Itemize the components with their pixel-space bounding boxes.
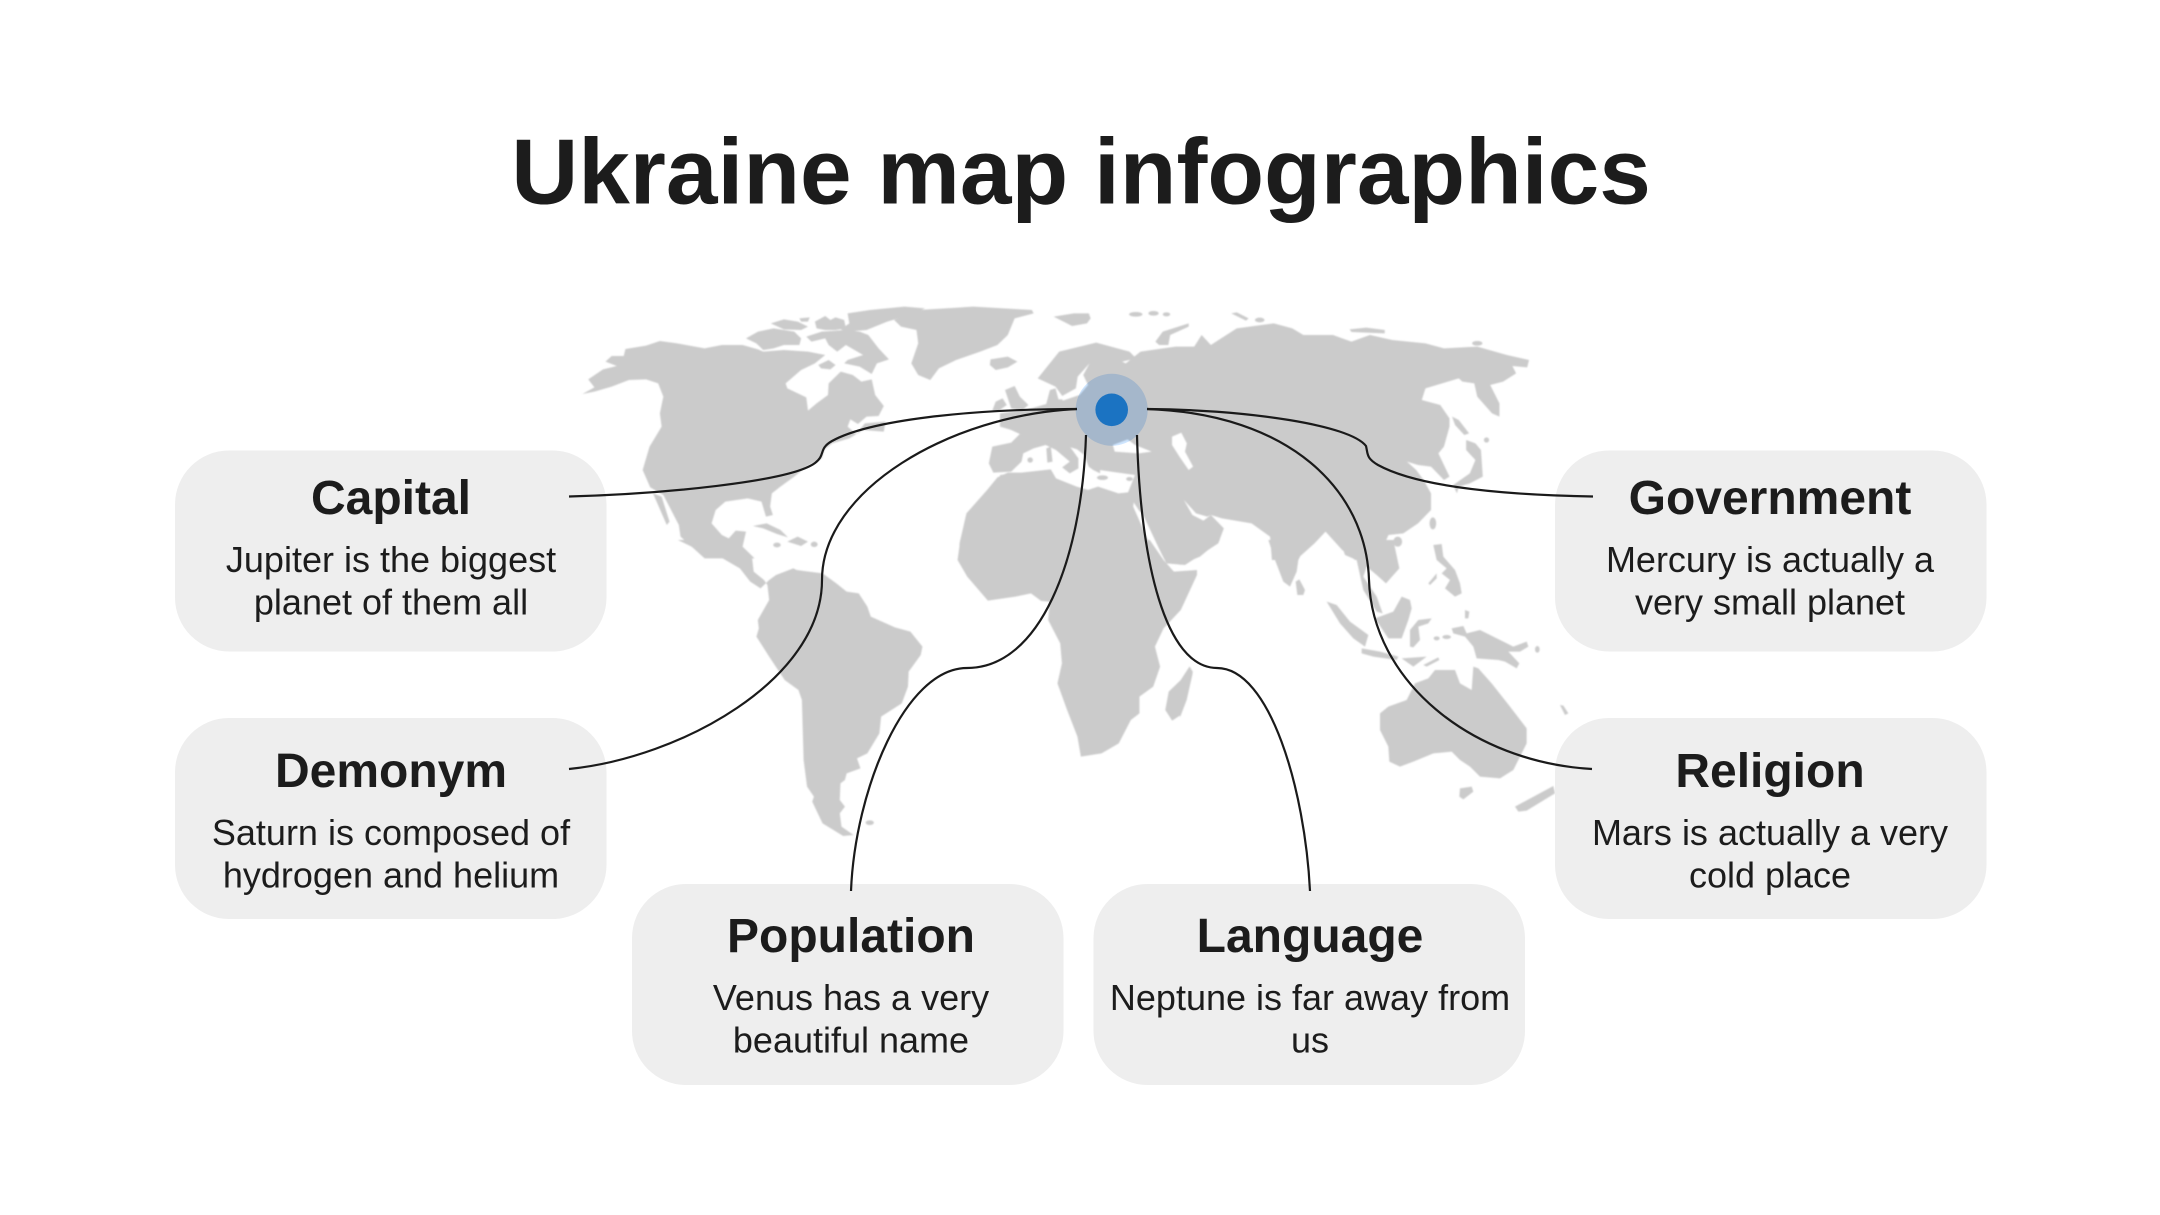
- panel: demonym: Saturn is composed of: [212, 812, 571, 853]
- panel: population: Population: [727, 910, 975, 963]
- panel: language: Language: [1197, 910, 1423, 963]
- panel: population: Venus has a very: [713, 977, 989, 1018]
- panel: language: us: [1291, 1020, 1329, 1060]
- panel: religion: [1555, 718, 1986, 919]
- panel: demonym: Demonym: [275, 745, 507, 798]
- panel: capital: Capital: [311, 472, 471, 525]
- panel: religion: Mars is actually a very: [1592, 812, 1948, 853]
- panel: religion: cold place: [1689, 854, 1851, 896]
- panel: population: [632, 884, 1064, 1085]
- panel: capital: [175, 450, 606, 652]
- panel: government: [1555, 450, 1986, 652]
- panel: demonym: hydrogen and helium: [223, 854, 559, 896]
- connector lines: [569, 409, 1593, 891]
- world map: [582, 307, 1568, 836]
- location pin: Ukraine: [1076, 374, 1148, 446]
- panel: government: Mercury is actually a: [1606, 539, 1935, 580]
- title: Ukraine map infographics: [511, 120, 1651, 224]
- panel: religion: Religion: [1675, 745, 1865, 798]
- panel: government: very small planet: [1635, 582, 1905, 622]
- panel: government: Government: [1629, 472, 1911, 525]
- panel: language: [1094, 884, 1525, 1085]
- panel: capital: planet of them all: [254, 582, 528, 622]
- panel: capital: Jupiter is the biggest: [226, 539, 556, 580]
- panel: population: beautiful name: [733, 1020, 969, 1060]
- panel: language: Neptune is far away from: [1110, 977, 1510, 1018]
- panel: demonym: [175, 718, 606, 919]
